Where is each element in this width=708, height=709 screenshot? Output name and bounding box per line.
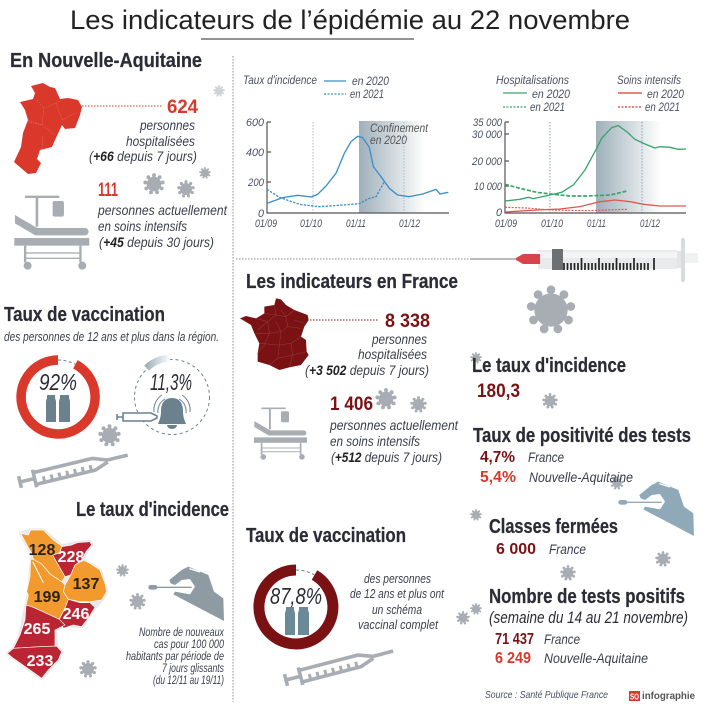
y axis labels — [246, 117, 265, 220]
stat: 111 soins intensifs: en soins intensifs — [98, 218, 187, 234]
row: France — [480, 449, 564, 466]
stat: 111 soins intensifs — [97, 180, 228, 250]
stat: 8 338 hospitalisations — [305, 311, 430, 378]
icon: bell — [154, 395, 190, 429]
icon: swab hand — [618, 482, 694, 536]
icon: virus — [177, 180, 195, 197]
line soins intensifs 2020 — [505, 200, 686, 212]
stat: 624 hospitalisations: (+66 depuis 7 jours) — [89, 148, 197, 164]
heading: Taux de vaccination: Taux de vaccination — [246, 525, 406, 547]
y axis labels: 10 000 — [474, 181, 503, 193]
logo: SO infographie: infographie — [642, 691, 695, 702]
note: definition of incidence: habitants par période de — [126, 651, 224, 663]
map value: 228: 228 — [58, 549, 84, 566]
legend: Soins intensifs — [617, 73, 681, 87]
x axis labels: 01/10 — [300, 218, 323, 230]
x axis labels: 01/11 — [587, 218, 606, 230]
row: Nouvelle-Aquitaine: Nouvelle-Aquitaine — [544, 650, 648, 666]
row: France: France — [528, 449, 564, 465]
map value: 246: 246 — [63, 606, 89, 623]
line soins intensifs 2021 — [505, 207, 627, 211]
icon: big virus — [527, 285, 575, 333]
x axis labels — [495, 218, 660, 230]
stat: 624 hospitalisations: hospitalisées — [126, 133, 195, 149]
legend: Hospitalisations — [496, 73, 569, 87]
text: vaccination caption — [350, 571, 445, 632]
text: vaccination caption: des personnes — [364, 571, 431, 586]
legend: en 2021 — [645, 100, 680, 114]
heading: Le taux d'incidence: Le taux d'incidence — [76, 499, 229, 521]
legend — [243, 73, 389, 101]
stat: 1 406 soins intensifs: 1 406 — [330, 394, 373, 415]
icon: virus — [470, 352, 482, 364]
icon: gray syringe — [284, 643, 396, 689]
note: definition of incidence — [126, 627, 225, 687]
text: vaccination caption: de 12 ans et plus ont — [350, 586, 445, 601]
heading: Les indicateurs en France: Les indicateurs en France — [246, 271, 458, 293]
row: Nouvelle-Aquitaine: 5,4% — [480, 469, 516, 486]
x axis labels: 01/12 — [640, 218, 660, 230]
donut: 87,8%: 87,8% — [270, 583, 322, 609]
heading: Le taux d'incidence — [472, 355, 626, 377]
icon: virus — [470, 603, 482, 615]
heading: En Nouvelle-Aquitaine: En Nouvelle-Aquitaine — [10, 50, 202, 72]
icon: swab hand — [148, 567, 224, 621]
confinement label: en 2020 — [370, 133, 407, 147]
x axis labels: 01/12 — [399, 218, 420, 230]
panel: tests positifs — [456, 586, 688, 667]
stat: 8 338 hospitalisations: hospitalisées — [358, 346, 427, 362]
stat: 1 406 soins intensifs: (+512 depuis 7 jours) — [331, 449, 442, 465]
line 2020 — [267, 136, 448, 203]
icon: virus — [129, 593, 146, 609]
stat: 8 338 hospitalisations: 8 338 — [385, 311, 430, 332]
row: 6 000 France: France — [549, 541, 586, 557]
map value: 199: 199 — [34, 589, 60, 606]
panel: classes fermées — [470, 509, 671, 580]
heading: Taux de vaccination: Taux de vaccination — [4, 304, 165, 326]
y axis labels: 400 — [246, 147, 265, 159]
icon: virus — [143, 173, 165, 194]
row: Nouvelle-Aquitaine: Nouvelle-Aquitaine — [529, 469, 633, 485]
x axis labels — [255, 218, 420, 230]
note: definition of incidence: 7 jours glissants — [162, 663, 224, 675]
icon: hospital bed — [254, 407, 307, 460]
line hospitalisations 2021 — [505, 184, 627, 196]
value: 180,3: 180,3 — [477, 381, 520, 402]
stat: 8 338 hospitalisations: (+3 502 depuis 7 jours) — [305, 362, 429, 378]
map: départements — [7, 530, 107, 678]
stat: 624 hospitalisations: 624 — [167, 97, 198, 118]
logo: SO infographie: SO — [630, 692, 639, 702]
map value: 265: 265 — [24, 621, 50, 638]
icon: virus — [213, 85, 225, 97]
legend: en 2020 — [352, 74, 389, 88]
note: definition of incidence: cas pour 100 000 — [154, 639, 224, 651]
stat: 111 soins intensifs: 111 — [98, 180, 118, 201]
icon: hospital bed — [14, 196, 89, 270]
x axis labels: 01/11 — [346, 218, 366, 230]
row: France: France — [544, 631, 580, 647]
legend: en 2021 — [530, 100, 565, 114]
stat: 624 hospitalisations — [89, 97, 198, 164]
y axis labels — [471, 117, 503, 219]
icon: gray syringe — [18, 447, 130, 491]
map value: 128: 128 — [29, 542, 55, 559]
icon: virus — [470, 509, 482, 521]
icon: virus — [542, 393, 558, 408]
chart: hospitalisations et soins intensifs — [471, 73, 686, 230]
stat: 1 406 soins intensifs — [329, 394, 459, 465]
illustration: syringe — [470, 238, 698, 282]
legend: Taux d'incidence — [243, 73, 317, 87]
y axis labels: 30 000 — [472, 129, 503, 141]
source: Source : Santé Publique France — [485, 689, 608, 701]
title: Les indicateurs de l’épidémie au 22 novembre — [70, 5, 630, 35]
icon: virus — [410, 396, 427, 412]
note: definition of incidence: (du 12/11 au 19/11) — [153, 675, 224, 687]
donut: 87,8% — [259, 570, 333, 644]
legend: en 2020 — [647, 87, 684, 101]
legend: en 2020 — [532, 87, 570, 101]
row: Nouvelle-Aquitaine — [480, 469, 633, 486]
donut: 92% — [21, 360, 95, 434]
panel: taux d'incidence par département — [7, 499, 229, 687]
line hospitalisations 2020 — [505, 126, 686, 201]
gauge: 11,3%: 11,3% — [150, 369, 192, 395]
map value: 137: 137 — [73, 576, 99, 593]
panel: Nouvelle-Aquitaine — [10, 50, 228, 270]
map: France — [240, 298, 309, 370]
panel: indicateurs en France — [240, 271, 459, 465]
row: France: 4,7% — [480, 449, 515, 466]
icon: virus — [116, 564, 129, 577]
icon: virus — [610, 476, 624, 490]
icon: virus — [375, 388, 397, 409]
icon: virus — [456, 611, 470, 625]
map value: 233: 233 — [27, 653, 53, 670]
stat: 111 soins intensifs: (+45 depuis 30 jours) — [99, 234, 214, 250]
stat: 111 soins intensifs: personnes actuellement — [97, 202, 228, 218]
y axis labels: 200 — [247, 177, 265, 189]
x axis labels: 01/09 — [255, 218, 277, 230]
stat: 624 hospitalisations: personnes — [139, 117, 195, 133]
row: Nouvelle-Aquitaine: 6 249 — [495, 650, 531, 667]
y axis labels: 0 — [496, 207, 503, 219]
icon: virus — [79, 660, 97, 677]
note: definition of incidence: Nombre de nouveaux — [139, 627, 225, 639]
y axis labels: 0 — [258, 208, 265, 220]
row: France: 71 437 — [495, 631, 534, 648]
legend: en 2021 — [350, 87, 384, 101]
chart: taux d'incidence — [243, 73, 449, 230]
y axis labels: 20 000 — [471, 156, 503, 168]
panel: Le taux d'incidence France — [470, 352, 626, 408]
heading: Classes fermées — [489, 516, 618, 538]
icon: virus — [199, 167, 211, 179]
row: France — [495, 631, 580, 648]
icon: virus — [98, 424, 121, 446]
row: 6 000 France: 6 000 — [496, 541, 536, 558]
row: Nouvelle-Aquitaine — [495, 650, 648, 667]
gauge: 11,3% — [117, 358, 210, 434]
x axis labels: 01/09 — [495, 218, 517, 230]
stat: 1 406 soins intensifs: en soins intensifs — [330, 433, 420, 449]
y axis labels: 600 — [246, 117, 265, 129]
icon: virus — [560, 565, 576, 580]
y axis labels: 35 000 — [473, 117, 503, 129]
icon: small syringe — [117, 413, 157, 421]
stat: 8 338 hospitalisations: personnes — [371, 331, 427, 347]
legend — [496, 73, 684, 114]
row: 6 000 France — [496, 541, 586, 558]
x axis labels: 01/10 — [541, 218, 564, 230]
line 2021 — [267, 182, 384, 207]
donut: 92%: 92% — [39, 369, 77, 395]
stat: 1 406 soins intensifs: personnes actuellement — [329, 417, 459, 433]
subheading: des personnes de 12 ans et plus dans la région. — [4, 329, 219, 344]
text: vaccination caption: vaccinal complet — [358, 617, 439, 632]
panel: taux de vaccination France — [246, 525, 445, 689]
map: Nouvelle-Aquitaine — [14, 83, 82, 174]
text: vaccination caption: un schéma — [372, 602, 422, 617]
panel: taux de vaccination région — [4, 304, 219, 491]
icon: virus — [655, 551, 671, 566]
confinement label: Confinement — [370, 121, 429, 135]
panel: taux de positivité — [473, 425, 694, 536]
